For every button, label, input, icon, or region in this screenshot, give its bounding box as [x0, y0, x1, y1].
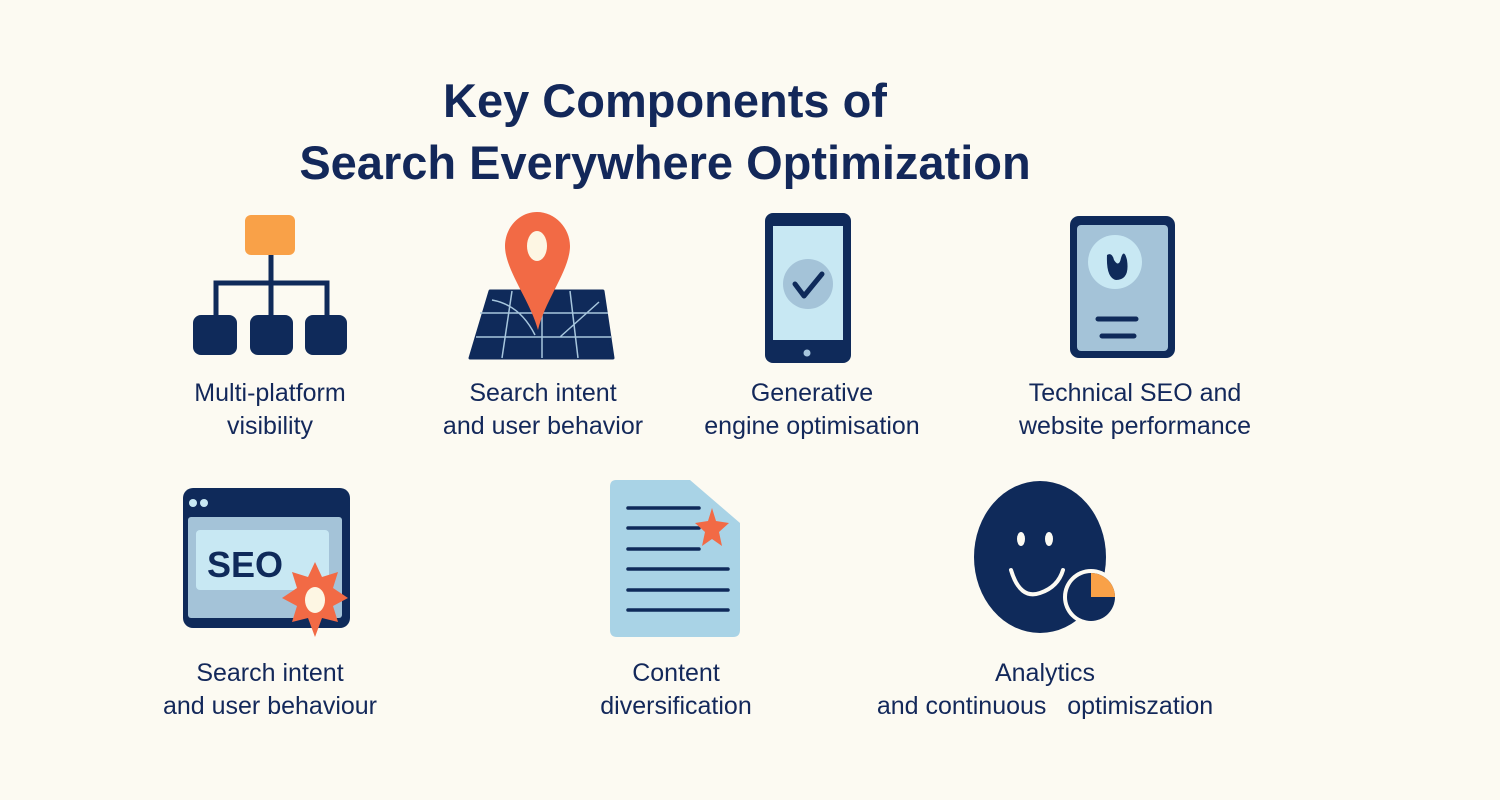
label: search intent 1: Search intent — [469, 379, 617, 407]
label: search intent 2: and user behaviour — [163, 692, 377, 720]
icon: SEO browser: SEO — [207, 544, 283, 585]
icon: smiley analytics — [974, 481, 1119, 633]
label: content — [600, 659, 752, 720]
label: generative: Generative — [751, 379, 873, 407]
label: technical SEO — [1019, 379, 1251, 440]
label: content: Content — [632, 659, 720, 687]
icon: phone — [765, 213, 851, 363]
label: analytics: and continuous optimiszation — [877, 692, 1213, 720]
label: technical SEO: Technical SEO and — [1029, 379, 1241, 407]
title: Search Everywhere Optimization — [299, 136, 1031, 189]
label: generative — [704, 379, 920, 440]
title: Key Components of — [443, 74, 887, 127]
label: content: diversification — [600, 692, 752, 720]
label: search intent 1 — [443, 379, 643, 440]
icon: map pin — [470, 212, 613, 358]
label: generative: engine optimisation — [704, 412, 920, 440]
icon: SEO browser — [183, 488, 350, 637]
label: search intent 1: and user behavior — [443, 412, 643, 440]
label: search intent 2 — [163, 659, 377, 720]
label: analytics: Analytics — [995, 659, 1095, 687]
icon: document — [610, 480, 740, 637]
label: multi-platform — [194, 379, 346, 440]
label: analytics — [877, 659, 1213, 720]
icon: tablet — [1070, 216, 1175, 358]
label: multi-platform: visibility — [227, 412, 313, 440]
label: multi-platform: Multi-platform — [194, 379, 346, 407]
title — [299, 74, 1031, 189]
label: technical SEO: website performance — [1019, 412, 1251, 440]
icon: hierarchy — [193, 215, 347, 355]
label: search intent 2: Search intent — [196, 659, 344, 687]
